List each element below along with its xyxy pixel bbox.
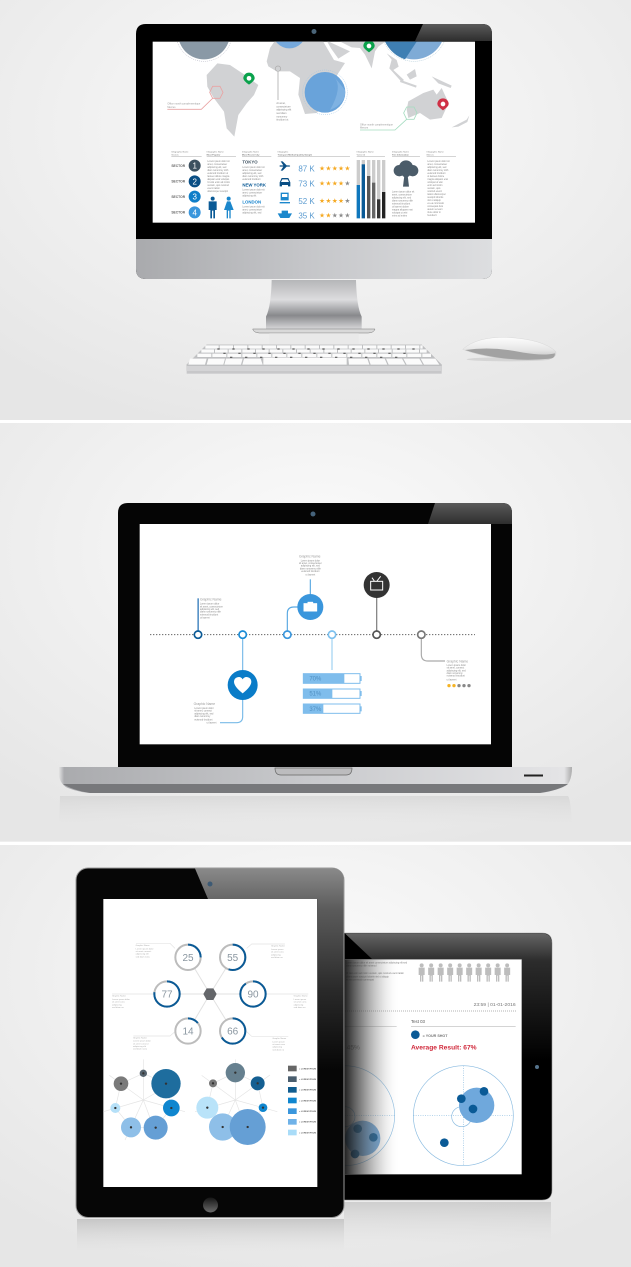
column headers: Most Popular bbox=[207, 153, 220, 156]
red pin Australia bbox=[437, 98, 449, 110]
lorem last column: magna aliquam erat bbox=[427, 178, 448, 181]
leader lines and labels: Lorem ipsum bbox=[271, 948, 284, 951]
node 1 with label: ut laoreet bbox=[200, 617, 210, 620]
column headers: Infographic Name bbox=[207, 151, 224, 154]
star ratings: ★ bbox=[332, 181, 338, 188]
node 3 with briefcase: diam nonummy nibh bbox=[300, 568, 322, 570]
star ratings: ★ bbox=[319, 166, 325, 173]
column headers bbox=[171, 151, 456, 157]
star ratings: ★ bbox=[325, 181, 331, 188]
leader lines and labels: adipiscing bbox=[271, 954, 281, 956]
legend: = LOREM IPSUM bbox=[299, 1079, 316, 1081]
legend: = LOREM IPSUM bbox=[299, 1132, 316, 1134]
lorem column two bbox=[207, 160, 230, 193]
node 6 with rating: Lorem ipsum dolor bbox=[447, 664, 466, 667]
node 6 with rating bbox=[418, 631, 471, 687]
header text left: Lorem ipsum dolor sit amet consectetuer adipiscing elit sed bbox=[346, 961, 408, 964]
leader lines and labels: Graphic Name bbox=[294, 995, 308, 998]
left tablet camera bbox=[208, 882, 212, 886]
node 6 with rating: euismod tincidunt bbox=[447, 675, 465, 678]
average result: Average Result: 67% bbox=[411, 1044, 477, 1051]
cities column: diam nonummy nibh bbox=[242, 176, 264, 178]
donut values: 77 bbox=[161, 990, 173, 1001]
lorem column two: exerci tation bbox=[207, 187, 221, 190]
target chart: left bbox=[345, 1066, 395, 1166]
right tablet bbox=[344, 932, 552, 1200]
column headers: Infographic bbox=[278, 151, 289, 154]
legend: your shot: = YOUR SHOT bbox=[423, 1034, 448, 1038]
icon: ship bbox=[278, 211, 292, 218]
callout: grey pin line: nonummy bbox=[276, 115, 288, 118]
node 2 with heart: sit amet, consect bbox=[194, 710, 212, 713]
node 6 with rating: Graphic Name bbox=[447, 659, 468, 663]
star ratings bbox=[319, 166, 350, 219]
lorem last column: adipiscing elit, sed bbox=[427, 166, 447, 169]
column headers: Infographic Name bbox=[427, 151, 444, 154]
lorem column two: diam nonummy nibh bbox=[207, 170, 229, 172]
lorem column two: amet, consectetuer bbox=[207, 163, 227, 166]
icon: tree bbox=[394, 160, 418, 187]
left tablet bbox=[76, 868, 344, 1218]
leader lines and labels: sed diam no bbox=[272, 1049, 285, 1051]
sector list: 2 bbox=[192, 177, 197, 186]
lorem column two: Lorem ipsum dolor sit bbox=[207, 160, 230, 163]
sector list: SECTOR bbox=[171, 180, 186, 184]
leader lines and labels: sed diam no bbox=[112, 1007, 125, 1009]
transport values: 35 K bbox=[298, 211, 315, 220]
node 2 with heart: Lorem ipsum dolor bbox=[194, 707, 214, 710]
sector list: SECTOR bbox=[171, 211, 186, 215]
lorem last column: nisl ut aliquip bbox=[427, 199, 441, 202]
donut values: 14 bbox=[182, 1027, 194, 1038]
callout: grey pin line: sed diam bbox=[276, 112, 286, 115]
radial bubble chart: right bbox=[195, 1059, 277, 1145]
cities column bbox=[242, 160, 267, 215]
background: desktop section bbox=[0, 0, 631, 420]
lorem column two: veniam, quis nostrud bbox=[207, 184, 230, 187]
cities column: NEW YORK bbox=[242, 182, 267, 187]
leader lines and labels: sit amet cons bbox=[271, 951, 284, 954]
laptop reflection bbox=[59, 796, 572, 826]
node 1 with label: euismod tincidunt bbox=[200, 613, 218, 616]
column headers: Sectors bbox=[171, 153, 179, 156]
icon: man bbox=[209, 197, 217, 218]
map circle: large blue bbox=[384, 42, 444, 62]
column headers: Infographic Name bbox=[242, 151, 260, 154]
cities column: Lorem ipsum dolor sit bbox=[242, 188, 265, 191]
column headers: Merces bbox=[427, 153, 434, 156]
laptop bbox=[58, 503, 572, 826]
node 2 with heart: euismod tincidunt bbox=[194, 718, 213, 721]
green pin India bbox=[363, 40, 375, 52]
donut values: 25 bbox=[182, 953, 194, 964]
sector list: 1 bbox=[192, 162, 197, 171]
node 4 with battery bars: 37% bbox=[309, 707, 322, 713]
mouse bbox=[463, 337, 556, 361]
star ratings: ★ bbox=[344, 181, 350, 188]
icon: heart bbox=[234, 677, 251, 693]
header text left bbox=[346, 961, 408, 982]
hub connectors bbox=[167, 957, 253, 1031]
home button bbox=[203, 1198, 218, 1212]
callout: pink hexagon: Merces bbox=[167, 106, 176, 109]
right tablet screen bbox=[345, 959, 522, 1174]
right tablet camera bbox=[535, 1065, 539, 1069]
column headers: Most Recent City bbox=[242, 153, 260, 156]
star ratings: ★ bbox=[344, 198, 350, 205]
column headers: Votes 04 bbox=[357, 153, 366, 156]
node 2 with heart: adipiscing elit, sed bbox=[194, 712, 214, 715]
sector list: 3 bbox=[192, 193, 197, 202]
callout: grey pin line bbox=[275, 66, 292, 122]
lorem under tree: Lorem ipsum dolor sit bbox=[392, 191, 415, 194]
header text left: ex ea commodo consequat bbox=[346, 979, 374, 982]
transport values: 52 K bbox=[298, 197, 315, 206]
transport values: 87 K bbox=[298, 164, 315, 173]
column headers: Infographic Name bbox=[357, 151, 374, 154]
leader lines and labels: sed diam nonu bbox=[133, 1049, 148, 1051]
node 1 with label: sit amet, consectetuer bbox=[200, 605, 223, 608]
star ratings: ★ bbox=[344, 212, 350, 219]
left tablet body bbox=[76, 868, 344, 1218]
lorem last column: euismod tincidunt bbox=[427, 172, 446, 175]
monitor stand bbox=[253, 280, 375, 344]
star ratings: ★ bbox=[325, 198, 331, 205]
legend: = LOREM IPSUM bbox=[299, 1111, 316, 1113]
lorem last column: autem vel eum bbox=[427, 208, 443, 211]
node 1 with label bbox=[194, 598, 223, 638]
cities column: euismod tincidunt bbox=[242, 178, 261, 181]
legend: your shot bbox=[411, 1030, 448, 1039]
lorem under tree: diam nonummy nibh bbox=[392, 201, 414, 203]
lorem column two: laoreet dolore magna bbox=[207, 175, 230, 178]
lorem last column: iriure dolor in bbox=[427, 211, 441, 214]
callout: grey pin line: At amet, bbox=[276, 102, 286, 105]
lorem under tree: ut laoreet dolore bbox=[392, 206, 410, 209]
bar chart bbox=[357, 160, 385, 218]
keyboard bbox=[187, 345, 442, 374]
right tablet body bbox=[340, 933, 552, 1200]
star ratings: ★ bbox=[338, 166, 344, 173]
donut values: 66 bbox=[227, 1027, 239, 1038]
lorem column two: euismod tincidunt ut bbox=[207, 172, 228, 175]
map circle: Africa bbox=[303, 70, 347, 115]
donut values bbox=[161, 953, 259, 1038]
star ratings: ★ bbox=[332, 166, 338, 173]
leader lines and labels: Lorem ipsum dolor bbox=[133, 1040, 151, 1043]
donut charts bbox=[154, 945, 266, 1044]
leader lines and labels: adipiscing elit bbox=[136, 953, 149, 956]
header text left: diam nonummy nibh euismod bbox=[346, 966, 377, 968]
leader lines and labels: Graphic Name bbox=[271, 945, 286, 948]
leader lines and labels: sed diam no bbox=[294, 1007, 306, 1009]
callout: grey pin line: consectetuer bbox=[276, 105, 291, 108]
leader lines and labels bbox=[112, 943, 308, 1051]
legend: = LOREM IPSUM bbox=[299, 1090, 316, 1092]
node 4 with battery bars bbox=[303, 631, 362, 713]
leader lines and labels: adipiscing bbox=[294, 1004, 304, 1006]
desktop screen bbox=[152, 42, 475, 223]
tablet reflections bbox=[77, 1202, 551, 1253]
target chart: right bbox=[413, 1066, 513, 1166]
transport values bbox=[298, 166, 314, 218]
column headers: Tree Information bbox=[392, 153, 410, 156]
leader lines and labels: Lorem ipsum bbox=[294, 998, 306, 1001]
lorem last column: consequat duis bbox=[427, 205, 444, 208]
star ratings: ★ bbox=[332, 198, 338, 205]
transport icons bbox=[278, 161, 292, 218]
node 1 with label: Lorem ipsum dolor bbox=[200, 603, 220, 606]
star ratings: ★ bbox=[325, 166, 331, 173]
leader lines and labels: adipiscing bbox=[272, 1047, 283, 1049]
lorem last column: diam nonummy nibh bbox=[427, 170, 449, 172]
node 2 with heart: diam nonummy bbox=[194, 716, 211, 718]
star ratings: ★ bbox=[319, 198, 325, 205]
legend: = LOREM IPSUM bbox=[299, 1122, 316, 1124]
leader lines and labels: sit amet consect bbox=[133, 1042, 149, 1045]
laptop screen bbox=[140, 524, 491, 744]
map circle: blue top bbox=[276, 42, 303, 48]
cities column: LONDON bbox=[242, 200, 261, 205]
icon: tv bbox=[371, 576, 383, 590]
star ratings: ★ bbox=[325, 212, 331, 219]
lorem column two: adipiscing elit, sed bbox=[207, 166, 227, 169]
node 4 with battery bars: 51% bbox=[309, 692, 322, 698]
date: 23:59 | 01-01-2016 bbox=[474, 1002, 516, 1008]
legend: = LOREM IPSUM bbox=[299, 1068, 316, 1070]
timeline line bbox=[150, 633, 475, 636]
lorem under tree: volutpat ut wisi bbox=[392, 212, 408, 215]
leader lines and labels: Graphic Name bbox=[136, 944, 150, 947]
star ratings: ★ bbox=[332, 212, 338, 219]
cities column: amet, consectetuer bbox=[242, 191, 262, 194]
donut values: 90 bbox=[247, 990, 259, 1001]
node 3 with briefcase: adipiscing elit, sed bbox=[301, 565, 321, 568]
star ratings: ★ bbox=[338, 181, 344, 188]
callout: green hexagon bbox=[360, 107, 417, 130]
laptop base bbox=[58, 767, 572, 793]
star ratings: ★ bbox=[338, 198, 344, 205]
leader lines and labels: Graphic Name bbox=[112, 995, 127, 998]
node 1 with label: Graphic Name bbox=[200, 598, 222, 602]
icon: woman bbox=[224, 197, 234, 218]
node 1 with label: adipiscing elit, sed bbox=[200, 608, 220, 611]
node 6 with rating: adipiscing elit, sed bbox=[447, 669, 466, 672]
node 3 with briefcase: Lorem ipsum dolor bbox=[301, 559, 320, 562]
icon: train bbox=[280, 193, 290, 203]
leader lines and labels: sed diam nonu bbox=[136, 956, 151, 958]
glare on right tablet bezel bbox=[345, 934, 552, 1060]
lorem last column: veniam, quis bbox=[427, 188, 441, 190]
header text left: Ut wisi enim ad minim veniam, quis nostrud exerci tation bbox=[346, 972, 405, 975]
background: laptop section bbox=[0, 423, 631, 841]
world map bbox=[207, 41, 469, 137]
map circle: grey bbox=[177, 42, 231, 62]
icon: briefcase bbox=[304, 602, 317, 611]
lorem last column: tation ullamcorper bbox=[427, 193, 446, 196]
lorem under tree: magna aliquam erat bbox=[392, 209, 413, 212]
icon: plane bbox=[280, 161, 290, 171]
radial bubble chart: left bbox=[103, 1059, 185, 1140]
lorem under tree: amet, consectetuer bbox=[392, 194, 412, 197]
background: tablet section bbox=[0, 845, 631, 1267]
lorem last column bbox=[427, 160, 450, 217]
lorem last column: hendrerit bbox=[427, 214, 437, 217]
node 3 with briefcase bbox=[284, 555, 323, 638]
hub hexagon bbox=[203, 988, 217, 1000]
node 2 with heart bbox=[194, 631, 258, 724]
callout: grey pin line: adipiscing elit bbox=[276, 109, 292, 112]
laptop lid bbox=[118, 503, 512, 767]
sector list bbox=[171, 160, 201, 218]
lorem last column: Lorem ipsum dolor sit bbox=[427, 160, 450, 163]
lorem under tree: adipiscing elit, sed bbox=[392, 197, 412, 200]
lorem last column: nostrud exerci bbox=[427, 190, 442, 193]
people row bbox=[419, 963, 510, 982]
leader lines and labels: Graphic Name bbox=[272, 1037, 287, 1040]
leader lines and labels: sed diam no bbox=[271, 957, 284, 959]
column headers: Transport Method Quality Sample bbox=[278, 153, 313, 156]
lorem under tree: enim ad minim bbox=[392, 216, 407, 218]
callout: green hexagon: Merces bbox=[360, 127, 369, 130]
callout: pink hexagon bbox=[167, 86, 223, 109]
cities column: adipiscing elit, sed bbox=[242, 172, 262, 175]
node 6 with rating: diam nonummy bbox=[447, 673, 463, 675]
star ratings: ★ bbox=[319, 181, 325, 188]
lorem last column: volutpat ut wisi bbox=[427, 181, 443, 184]
cities column: amet, consectetuer bbox=[242, 169, 262, 172]
cities column: adipiscing elit, sed bbox=[242, 212, 262, 215]
cities column: adipiscing elit bbox=[242, 194, 257, 197]
right tablet screen: 45% bbox=[347, 1044, 360, 1051]
cities column: Lorem ipsum dolor sit bbox=[242, 166, 265, 169]
donut values: 55 bbox=[227, 953, 239, 964]
lorem column two: ullamcorper suscipit bbox=[207, 190, 228, 193]
leader lines and labels: Lorem ipsum dolor bbox=[112, 998, 130, 1001]
node 4 with battery bars: 70% bbox=[309, 677, 322, 683]
legend: = LOREM IPSUM bbox=[299, 1100, 316, 1102]
callout: pink hexagon: Office month complementique bbox=[167, 103, 201, 106]
node 3 with briefcase: ut laoreet bbox=[305, 574, 316, 577]
desktop monitor bbox=[136, 24, 492, 334]
cities column: amet, consectetuer bbox=[242, 209, 262, 212]
green pin South America bbox=[243, 73, 255, 85]
left tablet screen bbox=[103, 899, 317, 1187]
node 3 with briefcase: euismod tincidunt bbox=[301, 570, 320, 573]
column headers: Infographic Name bbox=[171, 151, 189, 154]
cities column: Lorem ipsum dolor sit bbox=[242, 206, 265, 209]
glare on monitor bezel bbox=[415, 24, 492, 41]
lorem last column: amet, consectetuer bbox=[427, 163, 447, 166]
lorem under tree: euismod tincidunt bbox=[392, 203, 410, 206]
lorem column two: aliquam erat volutpat. bbox=[207, 178, 230, 181]
callout: green hexagon: Office month complementique bbox=[360, 123, 394, 126]
webcam bbox=[312, 29, 316, 34]
leader lines and labels: sit amet consect bbox=[136, 950, 152, 953]
leader lines and labels: Lorem ipsum bbox=[272, 1040, 285, 1043]
leader lines and labels: Lorem ipsum dolor bbox=[136, 947, 154, 950]
leader lines and labels: sit amet cons bbox=[294, 1001, 306, 1004]
star ratings: ★ bbox=[344, 166, 350, 173]
lorem last column: ex ea commodo bbox=[427, 203, 445, 205]
test heading: Test 03 bbox=[411, 1019, 426, 1024]
leader lines and labels: sit amet cons bbox=[112, 1001, 125, 1004]
leader lines and labels: sit amet cons bbox=[272, 1043, 285, 1046]
sector list: SECTOR bbox=[171, 195, 186, 199]
node 1 with label: diam nonummy nibh bbox=[200, 612, 222, 614]
lorem column two: Ut wisi enim ad minim bbox=[207, 181, 230, 184]
star ratings: ★ bbox=[338, 212, 344, 219]
node 3 with briefcase: sit amet, consectetuer bbox=[299, 562, 322, 565]
star ratings: ★ bbox=[319, 212, 325, 219]
glare on laptop bezel bbox=[428, 503, 512, 524]
lorem last column: ut laoreet dolore bbox=[427, 175, 445, 178]
leader lines and labels: adipiscing bbox=[112, 1004, 122, 1006]
cities column: TOKYO bbox=[242, 160, 258, 165]
node 3 with briefcase: Graphic Name bbox=[299, 555, 321, 559]
legend bbox=[288, 1066, 316, 1135]
shadow from front tablet bbox=[345, 959, 400, 1174]
lorem last column: suscipit lobortis bbox=[427, 196, 444, 199]
node 5 with tv bbox=[364, 572, 390, 638]
column headers: Infographic Name bbox=[392, 151, 410, 154]
node 2 with heart: Graphic Name bbox=[194, 702, 215, 706]
lorem last column: enim ad minim bbox=[427, 185, 443, 187]
laptop webcam bbox=[310, 512, 316, 516]
leader lines and labels: adipiscing elit bbox=[133, 1045, 146, 1048]
transport values: 73 K bbox=[298, 179, 315, 188]
leader lines and labels: Graphic Name bbox=[133, 1036, 148, 1039]
sector list: 4 bbox=[192, 208, 197, 217]
node 6 with rating: ut laoreet bbox=[447, 678, 457, 681]
glare on left tablet bbox=[195, 868, 344, 1070]
icon: car bbox=[280, 178, 290, 186]
header text left: ullamcorper suscipit lobortis nisl ut aliquip bbox=[346, 975, 390, 978]
monitor body bbox=[136, 24, 492, 279]
node 6 with rating: sit amet, consect bbox=[447, 667, 464, 670]
sector list: SECTOR bbox=[171, 164, 186, 168]
node 2 with heart: ut laoreet bbox=[207, 721, 217, 724]
callout: grey pin line: tincidunt ut bbox=[276, 119, 289, 122]
lorem under tree bbox=[392, 191, 415, 218]
